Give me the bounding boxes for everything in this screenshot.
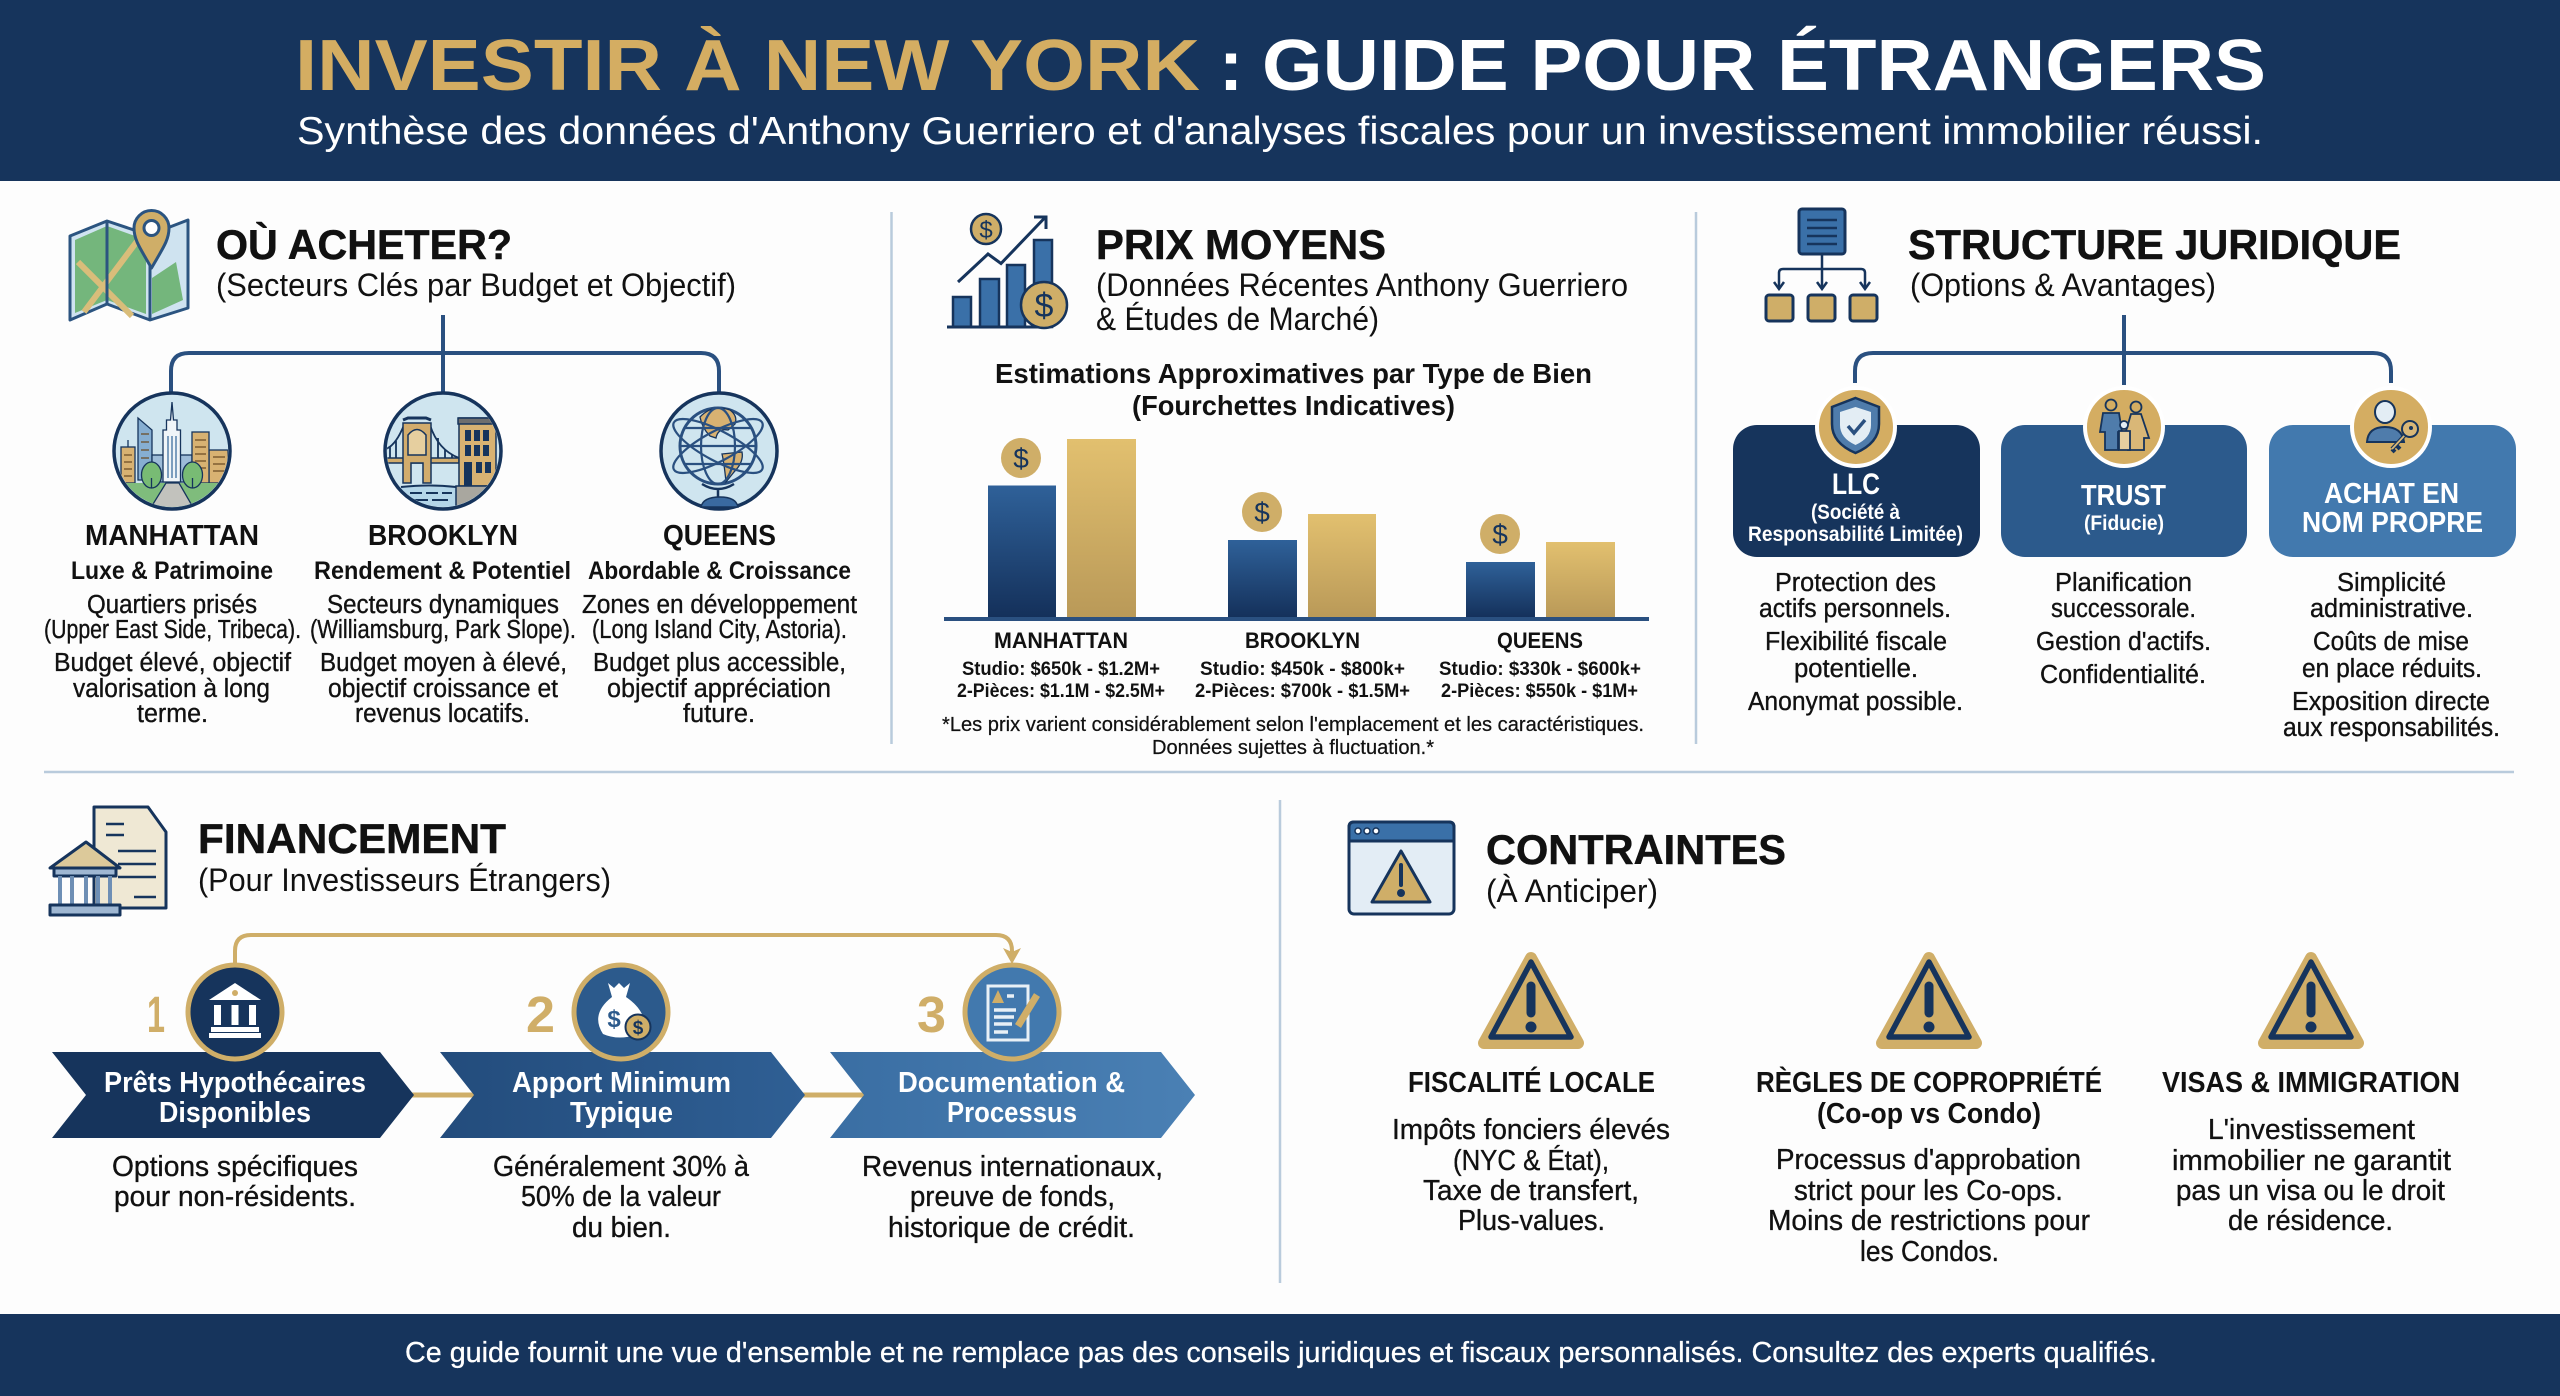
step 3: 3 xyxy=(917,986,946,1043)
subheading: & Études de Marché) xyxy=(1096,301,1379,337)
text: trust advantages xyxy=(2036,569,2211,689)
column: fiscalité locale: (NYC & État), xyxy=(1453,1144,1609,1177)
step 2: $ xyxy=(633,1018,644,1039)
heading: OÙ ACHETER? xyxy=(216,220,512,268)
column: visas et immigration: de résidence. xyxy=(2228,1205,2393,1237)
column: visas et immigration: pas un visa ou le droit xyxy=(2176,1175,2445,1207)
title white part: GUIDE POUR ÉTRANGERS xyxy=(1262,26,2266,106)
chart title xyxy=(995,358,1592,421)
text: LLC advantages: Anonymat possible. xyxy=(1748,688,1963,716)
column: visas et immigration: immobilier ne garantit xyxy=(2172,1145,2451,1177)
subheading: (Options & Avantages) xyxy=(1910,267,2216,303)
step 2: du bien. xyxy=(572,1212,671,1244)
step 3 xyxy=(830,965,1195,1244)
step 2: 50% de la valeur xyxy=(521,1181,721,1213)
column: règles de copropriété: (Co-op vs Condo) xyxy=(1817,1098,2041,1130)
icon: manhattan skyline xyxy=(110,393,234,513)
prices: brooklyn: BROOKLYN xyxy=(1245,628,1360,653)
card: LLC: (Société à xyxy=(1811,501,1900,524)
connector tree xyxy=(1855,315,2391,385)
column: queens: Budget plus accessible, xyxy=(593,649,846,677)
card: LLC xyxy=(1733,388,1980,557)
header banner xyxy=(0,0,2560,181)
column: règles de copropriété xyxy=(1756,958,2102,1268)
column: fiscalité locale: Taxe de transfert, xyxy=(1423,1175,1639,1207)
step 2: 2 xyxy=(526,986,555,1043)
step 1: Options spécifiques xyxy=(112,1151,358,1183)
step 2: Généralement 30% à xyxy=(493,1151,750,1183)
column: queens xyxy=(582,520,857,728)
column: brooklyn: objectif croissance et xyxy=(328,675,558,703)
column: règles de copropriété: les Condos. xyxy=(1860,1236,1999,1268)
step 1 xyxy=(52,965,414,1213)
panel: structure juridique xyxy=(1733,209,2516,742)
step 3: historique de crédit. xyxy=(888,1212,1135,1244)
prices: brooklyn: 2-Pièces: $700k - $1.5M+ xyxy=(1195,680,1410,702)
text: trust advantages: Planification xyxy=(2055,569,2192,597)
column: fiscalité locale: Impôts fonciers élevés xyxy=(1392,1114,1670,1146)
step 2 xyxy=(440,965,805,1244)
heading: PRIX MOYENS xyxy=(1096,221,1386,268)
column: manhattan: Luxe & Patrimoine xyxy=(71,557,273,585)
prices: brooklyn: Studio: $450k - $800k+ xyxy=(1200,658,1405,680)
subheading: (Pour Investisseurs Étrangers) xyxy=(198,862,611,898)
prices: queens: 2-Pièces: $550k - $1M+ xyxy=(1441,680,1638,702)
step 3: preuve de fonds, xyxy=(910,1181,1115,1213)
icon: brooklyn bridge xyxy=(385,393,501,511)
column: brooklyn: revenus locatifs. xyxy=(355,700,530,728)
column: queens: future. xyxy=(683,700,755,728)
card: trust xyxy=(2001,388,2247,557)
subheading: (À Anticiper) xyxy=(1486,873,1658,909)
column: règles de copropriété: RÈGLES DE COPROPRIÉTÉ xyxy=(1756,1067,2102,1099)
prices: queens: QUEENS xyxy=(1497,628,1583,653)
links between chevrons xyxy=(410,1092,868,1098)
card: achat en nom propre: NOM PROPRE xyxy=(2302,507,2483,539)
column: fiscalité locale: Plus-values. xyxy=(1458,1205,1605,1237)
column: visas et immigration xyxy=(2162,958,2460,1237)
text: trust advantages: Gestion d'actifs. xyxy=(2036,628,2211,656)
subheading xyxy=(1096,267,1628,337)
prices: brooklyn xyxy=(1195,628,1410,702)
subheading: (Données Récentes Anthony Guerriero xyxy=(1096,267,1628,303)
icon: rising chart with coins xyxy=(947,214,1067,328)
text: achat advantages: Simplicité xyxy=(2337,569,2446,597)
heading: CONTRAINTES xyxy=(1486,826,1786,873)
card: trust: TRUST xyxy=(2081,480,2166,512)
footnote: *Les prix varient considérablement selon l'emplacement et les caractéristiques. xyxy=(942,713,1644,736)
icon: map with pin xyxy=(70,211,188,320)
text: trust advantages: Confidentialité. xyxy=(2040,661,2206,689)
column: brooklyn: Rendement & Potentiel xyxy=(314,557,571,585)
icon: rising chart with coins: $ xyxy=(1035,287,1054,325)
column: règles de copropriété: strict pour les Co-ops. xyxy=(1794,1175,2063,1207)
text: achat advantages: administrative. xyxy=(2310,595,2473,623)
column: queens: QUEENS xyxy=(663,520,776,552)
card: LLC: Responsabilité Limitée) xyxy=(1748,523,1963,546)
step 2: Apport Minimum xyxy=(512,1067,731,1099)
step 1: 1 xyxy=(147,986,165,1043)
prices: queens xyxy=(1439,628,1641,702)
step 3: Documentation & xyxy=(898,1067,1125,1099)
card: achat en nom propre: ACHAT EN xyxy=(2324,478,2459,510)
column: queens: (Long Island City, Astoria). xyxy=(592,616,847,644)
step 1: pour non-résidents. xyxy=(114,1181,356,1213)
card: LLC: LLC xyxy=(1832,468,1880,501)
step 3: Revenus internationaux, xyxy=(862,1151,1163,1183)
heading: FINANCEMENT xyxy=(198,815,506,862)
column: brooklyn: Secteurs dynamiques xyxy=(327,591,559,619)
icon: org chart document xyxy=(1766,209,1877,321)
heading: STRUCTURE JURIDIQUE xyxy=(1908,221,2401,268)
panel: contraintes xyxy=(1349,822,2460,1268)
card: trust: (Fiducie) xyxy=(2084,512,2164,535)
column: manhattan: valorisation à long xyxy=(73,675,270,703)
icon: warning window xyxy=(1349,822,1454,914)
footer banner: Ce guide fournit une vue d'ensemble et ne remplace pas des conseils juridiques et fiscaux personnalisés. Consultez des experts qualifiés. xyxy=(405,1337,2157,1369)
bar chart xyxy=(944,438,1649,621)
footer banner xyxy=(0,1314,2560,1396)
chart title: Estimations Approximatives par Type de Bien xyxy=(995,358,1592,389)
column: brooklyn: BROOKLYN xyxy=(368,520,518,552)
chart title: (Fourchettes Indicatives) xyxy=(1132,390,1455,421)
text: LLC advantages: actifs personnels. xyxy=(1759,595,1951,623)
text: achat advantages: Exposition directe xyxy=(2292,688,2490,716)
column: manhattan: MANHATTAN xyxy=(85,520,259,552)
prices: manhattan xyxy=(957,628,1165,702)
panel: financement xyxy=(50,807,1195,1244)
column: fiscalité locale: FISCALITÉ LOCALE xyxy=(1408,1067,1655,1099)
column: manhattan: Quartiers prisés xyxy=(87,591,257,619)
prices: manhattan: Studio: $650k - $1.2M+ xyxy=(962,658,1160,680)
prices: queens: Studio: $330k - $600k+ xyxy=(1439,658,1641,680)
text: LLC advantages xyxy=(1748,569,1963,716)
column: queens: Zones en développement xyxy=(582,591,857,619)
step 1: Disponibles xyxy=(159,1097,311,1129)
step 3: Processus xyxy=(947,1097,1077,1129)
footnote xyxy=(942,713,1644,759)
column: queens: Abordable & Croissance xyxy=(588,557,851,585)
text: LLC advantages: Protection des xyxy=(1775,569,1936,597)
subtitle: Synthèse des données d'Anthony Guerriero et d'analyses fiscales pour un investissement immobilier réussi. xyxy=(297,110,2263,153)
footnote: Données sujettes à fluctuation.* xyxy=(1152,736,1434,759)
step 1: Prêts Hypothécaires xyxy=(104,1067,366,1099)
text: LLC advantages: Flexibilité fiscale xyxy=(1765,628,1947,656)
text: achat advantages: Coûts de mise xyxy=(2313,628,2469,656)
title colon: : xyxy=(1219,26,1243,106)
column: règles de copropriété: Moins de restrictions pour xyxy=(1768,1205,2090,1237)
connector tree xyxy=(171,315,719,392)
text: achat advantages xyxy=(2283,569,2500,742)
panel: prix moyens xyxy=(942,214,1649,759)
column: brooklyn: Budget moyen à élevé, xyxy=(320,649,567,677)
column: visas et immigration: L'investissement xyxy=(2208,1114,2415,1146)
text: achat advantages: aux responsabilités. xyxy=(2283,714,2500,742)
icon: bank and document xyxy=(50,807,166,915)
icon: rising chart with coins: $ xyxy=(979,217,993,244)
column: queens: objectif appréciation xyxy=(607,675,831,703)
prices: manhattan: 2-Pièces: $1.1M - $2.5M+ xyxy=(957,680,1165,702)
column: règles de copropriété: Processus d'approbation xyxy=(1776,1144,2081,1176)
step 2: Typique xyxy=(570,1097,673,1129)
title gold part: INVESTIR À NEW YORK xyxy=(295,26,1200,106)
subheading: (Secteurs Clés par Budget et Objectif) xyxy=(216,267,736,303)
column: brooklyn xyxy=(310,520,576,728)
icon: queens globe xyxy=(661,393,777,509)
column: manhattan: Budget élevé, objectif xyxy=(54,649,292,677)
text: LLC advantages: potentielle. xyxy=(1794,655,1918,683)
column: manhattan: (Upper East Side, Tribeca). xyxy=(44,616,301,644)
column: visas et immigration: VISAS & IMMIGRATION xyxy=(2162,1067,2460,1099)
text: trust advantages: successorale. xyxy=(2051,595,2196,623)
column: brooklyn: (Williamsburg, Park Slope). xyxy=(310,616,576,644)
column: fiscalité locale xyxy=(1392,958,1670,1237)
column: manhattan xyxy=(44,520,301,728)
text: achat advantages: en place réduits. xyxy=(2302,655,2482,683)
prices: manhattan: MANHATTAN xyxy=(994,628,1128,653)
column: manhattan: terme. xyxy=(137,700,208,728)
card: achat en nom propre xyxy=(2269,388,2516,557)
arrow: gold process connector xyxy=(235,935,1021,964)
step 2: $ xyxy=(607,1006,621,1033)
panel: où acheter xyxy=(44,211,857,728)
